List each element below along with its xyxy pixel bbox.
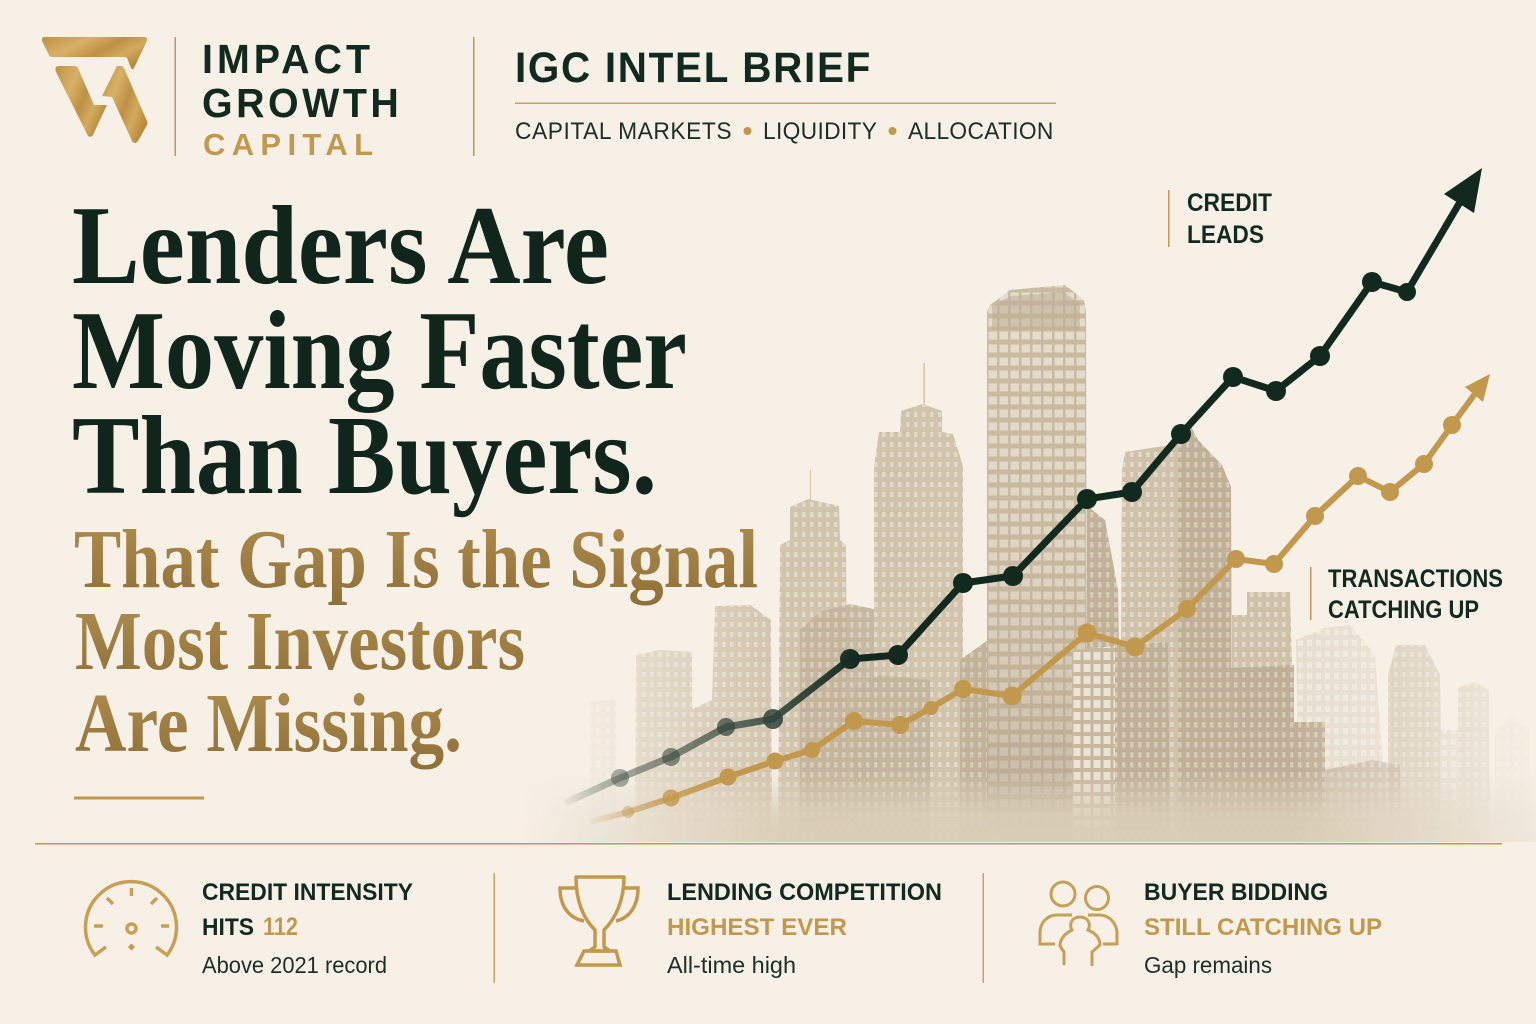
headline accent rule — [74, 796, 204, 800]
main headline: Lenders Are — [72, 184, 609, 308]
logo mark — [42, 37, 147, 143]
bottom rule — [35, 843, 1502, 844]
brief heading — [515, 43, 1056, 144]
header divider — [473, 37, 474, 156]
brief heading: CAPITAL MARKETS — [515, 117, 732, 144]
main headline — [72, 184, 687, 518]
icon: gauge — [86, 882, 176, 955]
stat: credit intensity: CREDIT INTENSITY — [202, 879, 413, 906]
skyline illustration — [520, 285, 1536, 842]
stat: lending competition: LENDING COMPETITION — [667, 879, 942, 906]
column divider — [982, 873, 984, 983]
column divider — [494, 873, 495, 983]
callout: credit leads — [1168, 189, 1272, 249]
stat: lending competition: All-time high — [667, 952, 796, 978]
brand name — [174, 36, 399, 162]
stat: buyer bidding: STILL CATCHING UP — [1144, 914, 1382, 941]
brief heading: LIQUIDITY — [763, 117, 877, 144]
callout: credit leads: CREDIT — [1187, 189, 1272, 217]
stat: buyer bidding — [1040, 879, 1382, 978]
stat: credit intensity: Above 2021 record — [202, 952, 387, 978]
main headline: Moving Faster — [72, 289, 687, 413]
credit line chart — [565, 168, 1482, 803]
brand name: IMPACT — [202, 36, 370, 82]
sub headline: Most Investors — [75, 595, 525, 688]
main headline: Than Buyers. — [72, 394, 657, 518]
stat: credit intensity: HITS — [202, 914, 254, 941]
sub headline: Are Missing. — [75, 677, 462, 770]
callout: transactions catching up: CATCHING UP — [1328, 596, 1479, 624]
stat: buyer bidding: Gap remains — [1144, 952, 1272, 978]
icon: trophy — [560, 877, 638, 965]
stat: credit intensity — [86, 879, 413, 978]
brand name: CAPITAL — [203, 127, 373, 162]
brand name: GROWTH — [202, 80, 399, 126]
brief heading: IGC INTEL BRIEF — [515, 43, 870, 91]
callout: credit leads: LEADS — [1187, 221, 1264, 249]
stat: lending competition: HIGHEST EVER — [667, 914, 847, 941]
callout: transactions catching up: TRANSACTIONS — [1328, 565, 1503, 593]
sub headline: That Gap Is the Signal — [74, 513, 758, 606]
icon: people — [1040, 882, 1117, 966]
sub headline — [74, 513, 758, 770]
stat: credit intensity: 112 — [263, 913, 298, 941]
transactions line chart — [590, 374, 1490, 822]
callout: transactions catching up — [1310, 565, 1503, 624]
stat: lending competition — [560, 877, 942, 978]
brief heading: ALLOCATION — [908, 117, 1053, 144]
stat: buyer bidding: BUYER BIDDING — [1144, 879, 1328, 906]
